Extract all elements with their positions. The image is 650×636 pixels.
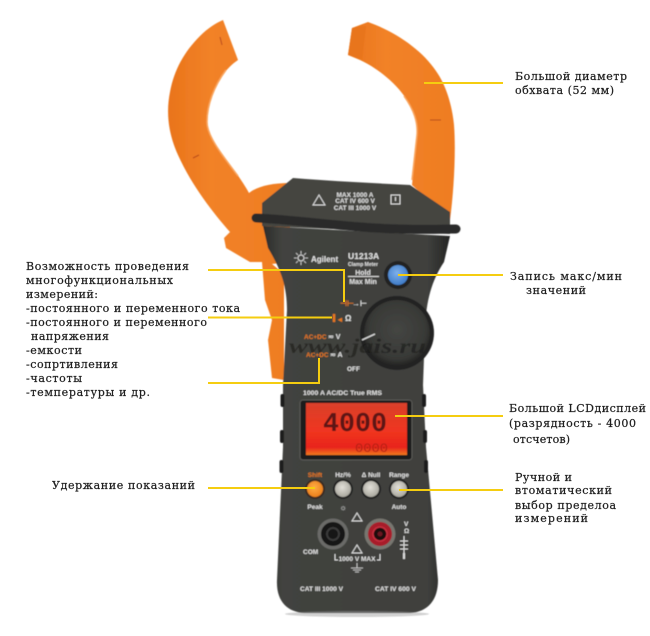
button labels [307,472,409,512]
button labels: ☼ [339,503,347,512]
callout: multifunction measurements: -постоянного и переменного тока [26,302,240,315]
LCD heading: 1000 A AC/DC True RMS [303,390,383,397]
bumper ridge [256,218,456,229]
button labels: Peak [307,504,323,511]
dial function labels: OFF [347,366,360,373]
category labels [300,586,417,593]
callout: hold reading: Удержание показаний [52,479,195,492]
function buttons [305,479,409,499]
button labels: Auto [392,504,406,511]
dial function labels: AC+DC [304,334,327,341]
dial function labels: ⊣⊢ [340,298,354,308]
callout: jaw opening: обхвата (52 мм) [515,84,614,97]
left jaw [168,20,290,380]
callout: max/min recording [510,270,622,297]
callout: multifunction measurements: -температуры и др. [26,386,150,399]
callout: multifunction measurements: многофункциональных [26,274,174,287]
dial function labels: →⊢ [352,298,367,308]
callout: range selection: измерений [515,512,588,525]
button labels: Δ Null [362,472,381,479]
callout: multifunction measurements: Возможность проведения [26,260,189,273]
LCD reading: 4000 [323,410,387,440]
callout lines [208,83,503,490]
rotary dial [360,296,434,370]
watermark: www.jais.ru [289,334,426,358]
input jacks [318,518,396,550]
callout: jaw opening: Большой диаметр [515,70,627,83]
callout: max/min recording: значений [526,284,586,297]
callout: multifunction measurements: -частоты [26,372,82,385]
brand and model labels: Agilent [311,255,338,264]
head label: ratings: MAX 1000 A [337,192,374,199]
callout: multifunction measurements: -сопртивления [26,358,118,371]
callout: jaw opening [515,70,627,97]
dial function labels: ≂ A [330,352,343,359]
button labels: Range [389,472,409,479]
callout: LCD display: Большой LCDдисплей [509,402,646,415]
LCD display [300,400,412,460]
brand and model labels: Clamp Meter [348,262,378,268]
head label: ratings: CAT IV 600 V [335,198,375,205]
dial function labels: AC+DC [306,352,329,359]
category labels: CAT IV 600 V [375,586,417,593]
button labels: Shift [308,472,323,479]
jack markings: V [404,521,409,528]
jack markings [303,513,409,572]
dial function labels: ◂ [337,315,343,324]
callout: LCD display: отсчетов) [513,433,570,446]
dial function labels: Ω [345,314,352,323]
callout: max/min recording: Запись макс/мин [510,270,622,283]
clamp meter [168,20,456,617]
callout: range selection [515,471,616,525]
callout: multifunction measurements: -емкости [26,344,82,357]
hold button (blue) [384,261,412,289]
callout: LCD display [509,402,646,446]
brand and model labels: U1213A [348,251,379,261]
right jaw [348,22,455,220]
brand and model labels: Hold [355,270,371,277]
callout: LCD display: (разрядность - 4000 [509,417,636,430]
meter body [263,226,450,617]
brand and model labels [294,251,379,286]
jack markings: Ω [404,528,409,535]
head label: ratings: CAT III 1000 V [334,205,377,212]
category labels: CAT III 1000 V [300,586,344,593]
jack markings: 1000 V MAX [339,556,376,563]
callout: multifunction measurements: измерений: [26,288,98,301]
callout: range selection: Ручной и [515,471,572,484]
callout: multifunction measurements: -постоянного и переменного [26,316,207,329]
meter head [262,178,450,234]
dial function labels [304,298,367,373]
callout: range selection: выбор пределоа [515,499,616,512]
jack markings: COM [303,549,318,556]
callout: multifunction measurements: напряжения [31,330,109,343]
dial function labels: ≂ V [328,334,341,341]
callout: range selection: втоматический [515,484,612,497]
brand and model labels: Max Min [349,279,377,286]
callout: multifunction measurements [26,260,240,399]
head label: ratings [334,192,377,212]
LCD display: 0000 [355,441,388,456]
button labels: Hz/% [335,472,351,479]
